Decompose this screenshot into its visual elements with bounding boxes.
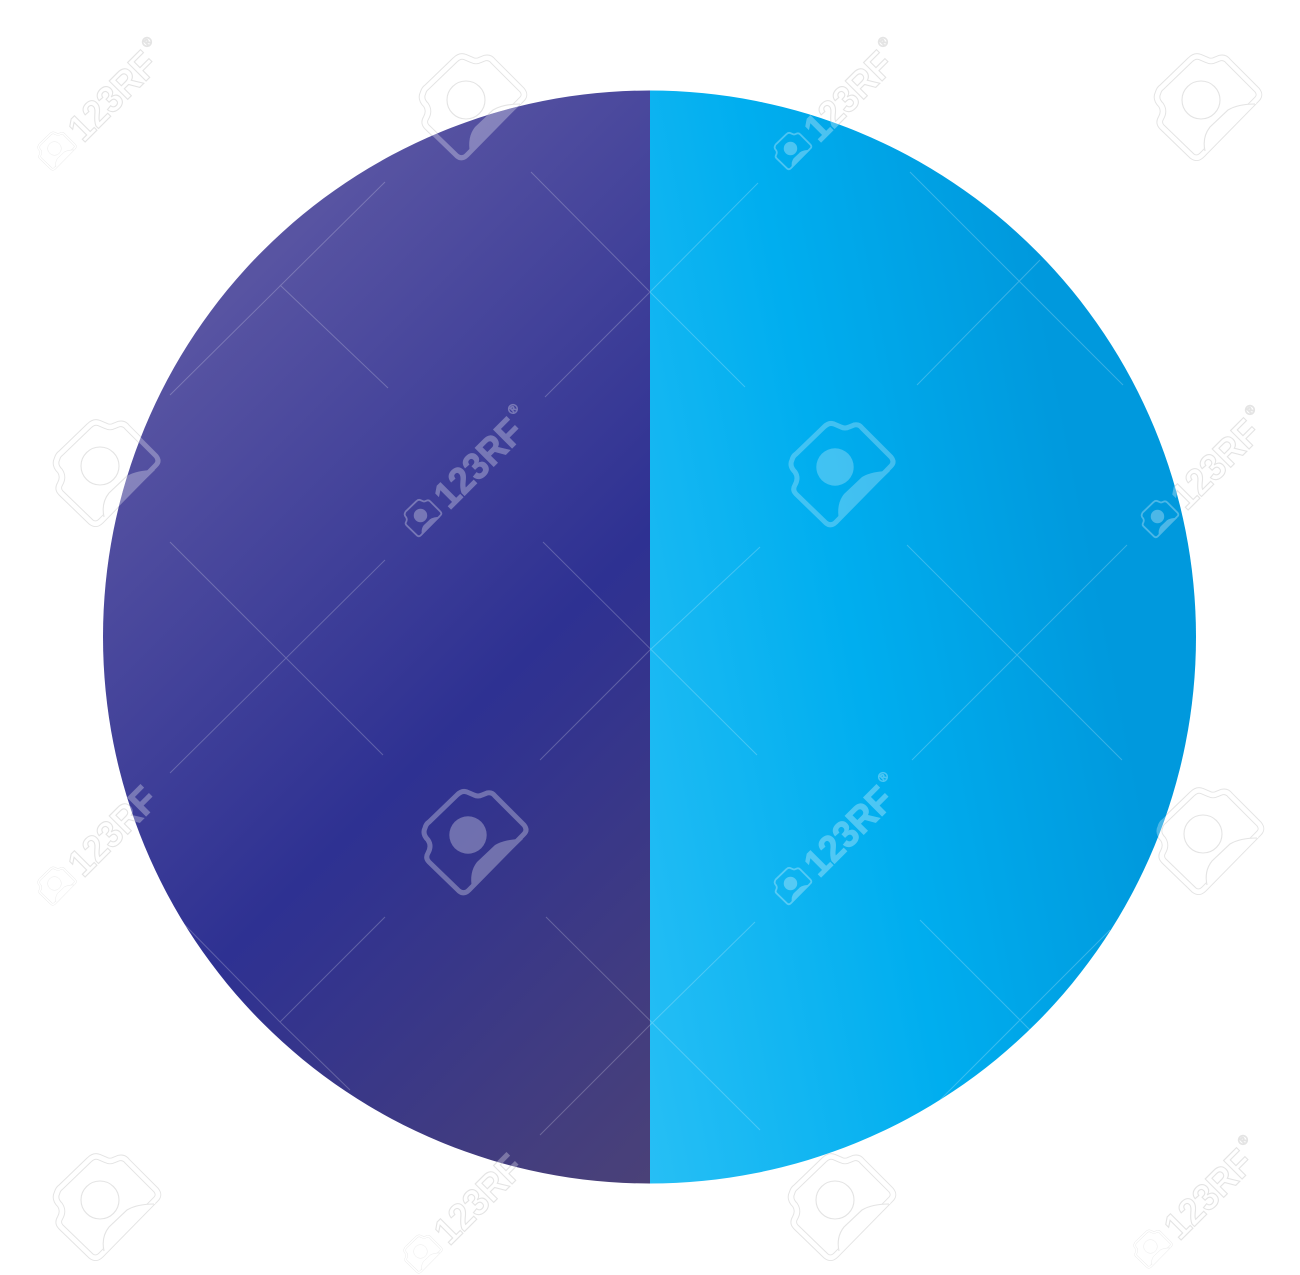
watermark logo: bottom right: 123RF [1156,1142,1262,1248]
thin crossing lines [170,172,1127,1135]
watermark logo: top left: 123RF [60,44,166,150]
watermark logo: centre left over circle: ® [504,400,522,418]
watermark logo: top left: ® [138,33,156,51]
watermark logo: top centre: 123RF [796,44,902,150]
watermark icon: top row [422,56,1259,158]
watermark logo: top left [20,29,179,188]
watermark logo: left lower: ® [138,768,156,786]
watermark logo: right middle over circle: 123RF [1163,412,1269,518]
watermark logo: bottom centre [386,1132,545,1275]
watermark icon: bottom row [56,1156,893,1258]
watermark logo: top centre [756,29,915,188]
watermark logo: right middle [1123,397,1282,556]
watermark logo: right middle: 123RF [1163,412,1269,518]
watermark icon: middle row [56,422,1261,892]
watermark logo: lower centre over circle [774,772,888,906]
right half segment [650,85,1200,1190]
watermark logo: top centre over circle [756,39,905,188]
watermark logo: bottom centre over circle [386,1142,535,1275]
watermark logo: left lower over circle: 123RF [60,779,166,885]
watermark logo: bottom right [1116,1127,1275,1275]
watermark logo: left lower: 123RF [60,779,166,885]
watermark logo: bottom centre: ® [504,1136,522,1154]
watermark logo: right middle over circle [1140,486,1180,538]
watermarks over circle [119,106,1180,1167]
watermark logo: bottom centre over circle: 123RF [426,1147,532,1253]
watermark logo: bottom centre: 123RF [426,1147,532,1253]
watermark logo: top centre over circle: 123RF [796,44,902,150]
watermark logo: right middle: ® [1241,401,1259,419]
watermark logo: lower centre over circle: ® [874,768,892,786]
watermark logo: lower centre over circle: 123RF [796,779,902,885]
watermark logo: centre left over circle: 123RF [426,411,532,517]
watermark logo: centre left over circle [386,396,545,555]
watermark logo: left lower over circle [127,784,152,823]
watermark logo: top centre: ® [874,33,892,51]
watermark logo: left lower [20,764,179,923]
circle diagram [103,90,1196,1184]
left half segment [100,85,650,1190]
watermark logo: bottom right: ® [1234,1131,1252,1149]
watermark icons over circle [56,56,1261,893]
